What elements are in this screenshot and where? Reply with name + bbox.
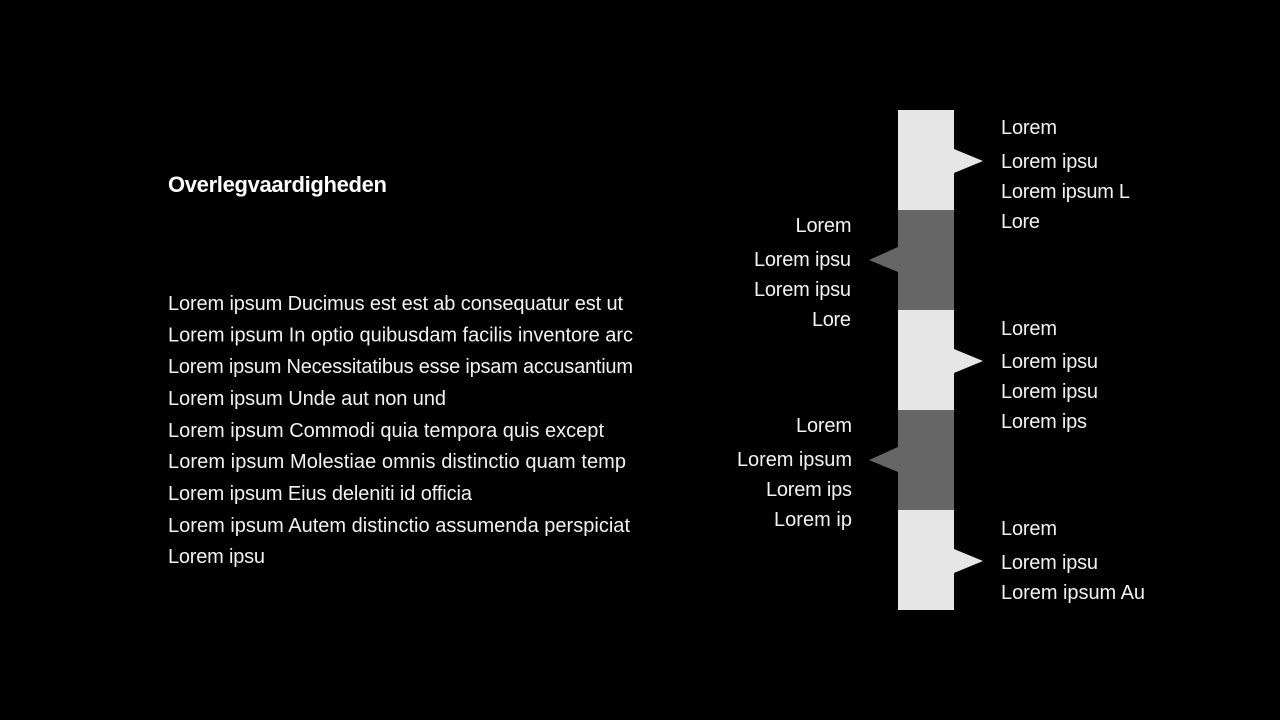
text block: body list: Lorem ipsum Autem distinctio assumenda perspiciat xyxy=(168,515,630,537)
labels: segment 2: Lorem ipsu xyxy=(754,249,851,271)
text block: body list: Lorem ipsum Necessitatibus esse ipsam accusantium xyxy=(168,356,633,378)
labels: segment 5: Lorem xyxy=(1001,518,1057,540)
labels: segment 3 xyxy=(1001,318,1098,433)
labels: segment 3: Lorem ips xyxy=(1001,411,1087,433)
labels: segment 3: Lorem ipsu xyxy=(1001,381,1098,403)
text block: body list: Lorem ipsum Eius deleniti id officia xyxy=(168,483,473,505)
labels: segment 4: Lorem xyxy=(796,415,852,437)
text block: body list: Lorem ipsum Ducimus est est ab consequatur est ut xyxy=(168,293,623,315)
labels: segment 2: Lorem xyxy=(796,215,852,237)
title: Overlegvaardigheden xyxy=(168,172,387,197)
segment 1 with right arrow xyxy=(898,110,983,210)
text block: body list xyxy=(168,293,633,568)
segment 2 with left arrow xyxy=(869,210,954,310)
labels: segment 5: Lorem ipsum Au xyxy=(1001,582,1145,604)
text block: body list: Lorem ipsu xyxy=(168,546,265,568)
text block: body list: Lorem ipsum Commodi quia tempora quis except xyxy=(168,420,604,442)
labels: segment 2 xyxy=(754,215,852,331)
labels: segment 1: Lore xyxy=(1001,211,1040,233)
text block: body list: Lorem ipsum Molestiae omnis distinctio quam temp xyxy=(168,451,626,473)
labels: segment 2: Lorem ipsu xyxy=(754,279,851,301)
labels: segment 1 xyxy=(1001,117,1130,233)
vertical segmented bar xyxy=(869,110,983,610)
text block: body list: Lorem ipsum In optio quibusdam facilis inventore arc xyxy=(168,324,633,346)
segment 4 with left arrow xyxy=(869,410,954,510)
labels: segment 4: Lorem ipsum xyxy=(737,449,852,471)
labels: segment 4 xyxy=(737,415,852,531)
segment 5 with right arrow xyxy=(898,510,983,610)
labels: segment 1: Lorem ipsu xyxy=(1001,151,1098,173)
labels: segment 4: Lorem ip xyxy=(774,509,852,531)
labels: segment 4: Lorem ips xyxy=(766,479,852,501)
labels: segment 1: Lorem ipsum L xyxy=(1001,181,1130,203)
labels: segment 2: Lore xyxy=(812,309,851,331)
labels: segment 3: Lorem ipsu xyxy=(1001,351,1098,373)
labels: segment 5 xyxy=(1001,518,1145,604)
labels: segment 3: Lorem xyxy=(1001,318,1057,340)
labels: segment 1: Lorem xyxy=(1001,117,1057,139)
labels: segment 5: Lorem ipsu xyxy=(1001,552,1098,574)
segment 3 with right arrow xyxy=(898,310,983,410)
text block: body list: Lorem ipsum Unde aut non und xyxy=(168,388,446,410)
